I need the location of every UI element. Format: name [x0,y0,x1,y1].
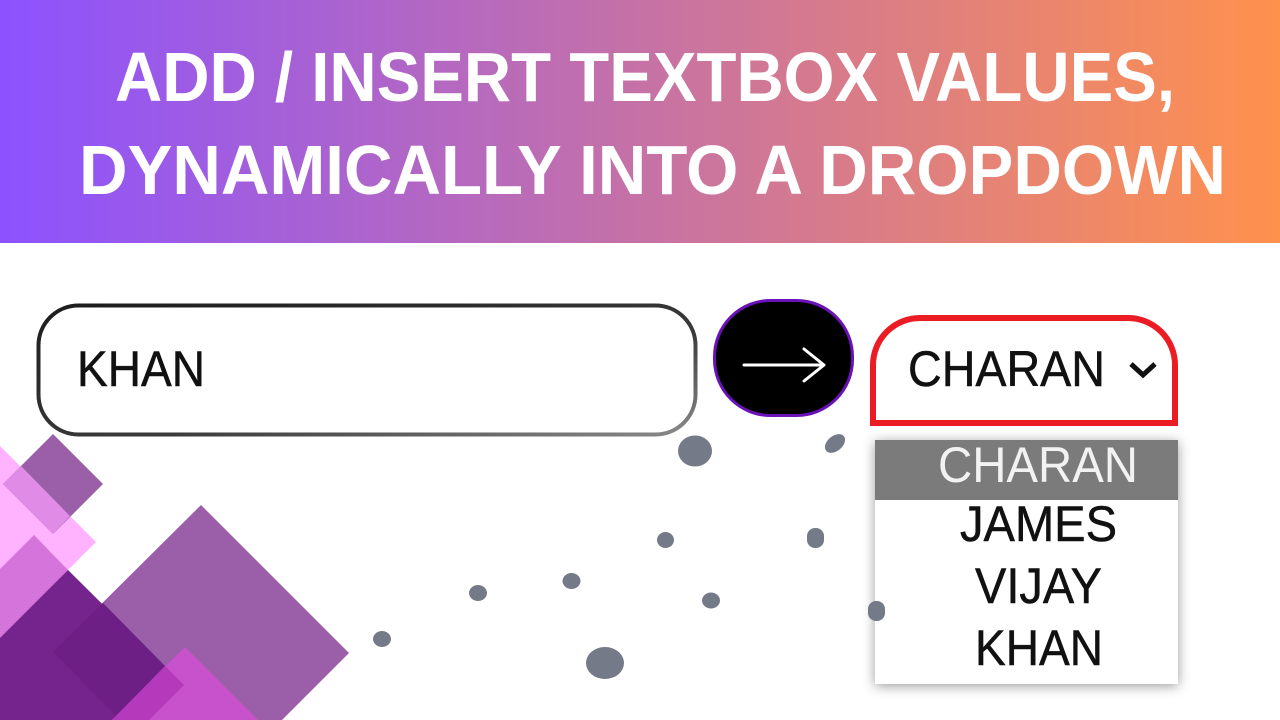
icon: arrow [744,349,824,381]
title [79,38,1226,209]
input value: KHAN [77,341,205,397]
highlighted option [875,437,1178,500]
option: Vijay: VIJAY [975,558,1102,614]
icon: chevron [1131,364,1155,375]
header banner [0,0,1280,243]
highlighted option: CHARAN [938,437,1138,493]
decorative diamonds [0,434,349,720]
option: Khan: KHAN [975,620,1103,676]
dropdown select [873,318,1175,423]
scattered dots [373,430,885,679]
arrow button [714,300,852,416]
dropdown list [875,437,1178,684]
title: DYNAMICALLY INTO A DROPDOWN [79,131,1226,209]
title: ADD / INSERT TEXTBOX VALUES, [115,38,1175,116]
selected value: CHARAN [908,341,1105,397]
text input [38,306,696,434]
option: James: JAMES [960,496,1117,552]
